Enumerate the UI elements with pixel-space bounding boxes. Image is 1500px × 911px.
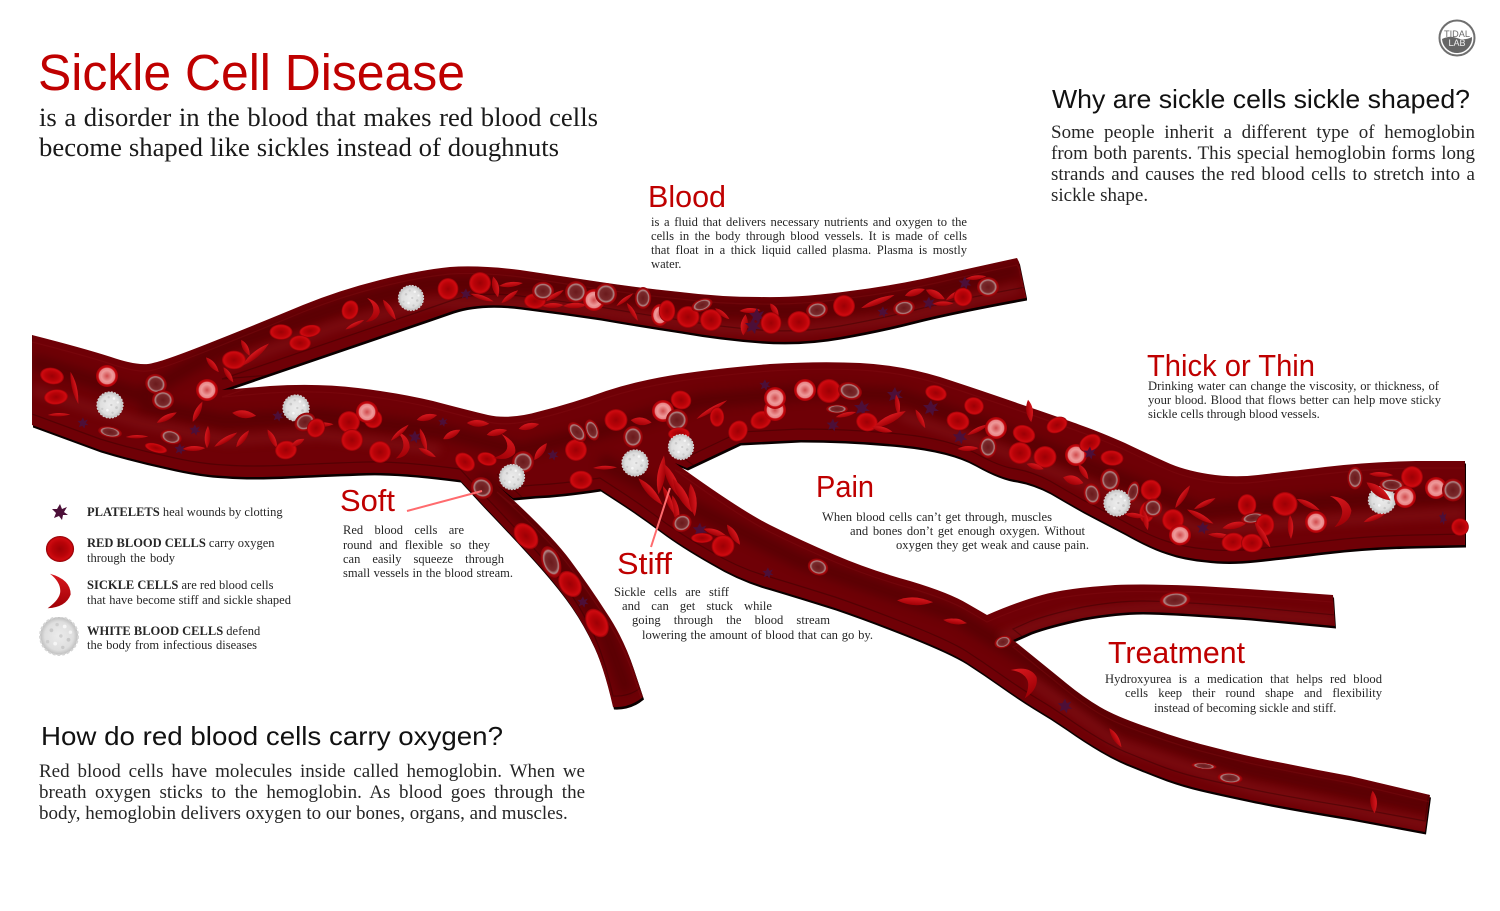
text: soft: small vessels in the blood stream. (343, 566, 513, 580)
legend item: red blood cells: through the body (87, 551, 175, 565)
text: how red blood cells carry oxygen: breath oxygen sticks to the hemoglobin. As blood goes through the (39, 782, 585, 803)
legend item: red blood cells: RED BLOOD CELLS carry oxygen (87, 536, 275, 550)
text: treatment: cells keep their round shape and flexibility (1125, 686, 1382, 700)
blood cells: stuck sickle cells and lower vessel (636, 455, 967, 626)
text: why sickle shaped: sickle shape. (1051, 185, 1148, 206)
logo: tidal lab: LAB (1448, 38, 1466, 48)
text: soft: Red blood cells are (343, 523, 464, 537)
callout line: soft (407, 491, 482, 511)
text: blood: cells in the body through blood vessels. It is made of cells (651, 229, 967, 243)
legend item: sickle cells (48, 574, 291, 608)
blood cells: upper vessel (269, 272, 999, 351)
blood cells: soft branch (466, 473, 614, 642)
heading: how red blood cells carry oxygen: How do red blood cells carry oxygen? (41, 721, 503, 751)
heading: soft: Soft (340, 483, 395, 518)
heading: pain: Pain (816, 469, 874, 504)
text: pain: When blood cells can’t get through, muscles (822, 510, 1052, 524)
text: treatment: Hydroxyurea is a medication that helps red blood (1105, 672, 1382, 686)
icon: sickle cell (48, 574, 71, 608)
text: thick or thin: sickle cells through blood vessels. (1148, 407, 1320, 421)
text: stiff: and can get stuck while (622, 599, 772, 613)
text: stiff: Sickle cells are stiff (614, 585, 729, 599)
text: pain: and bones don’t get enough oxygen. Without (850, 524, 1085, 538)
legend item: platelets: PLATELETS heal wounds by clotting (87, 505, 283, 519)
legend item: red blood cells (46, 536, 275, 565)
text: blood: water. (651, 257, 681, 271)
heading: blood: Blood (648, 179, 726, 214)
text: blood: is a fluid that delivers necessary nutrients and oxygen to the (651, 215, 967, 229)
text: why sickle shaped (1051, 122, 1475, 206)
subtitle: is a disorder in the blood that makes red blood cells (39, 102, 598, 132)
text: stiff: going through the blood stream (632, 613, 830, 627)
subtitle: become shaped like sickles instead of doughnuts (39, 132, 559, 162)
text: soft (343, 523, 513, 580)
text: thick or thin: Drinking water can change the viscosity, or thickness, of (1148, 379, 1439, 393)
text: why sickle shaped: strands and causes the red blood cells to stretch into a (1051, 164, 1475, 185)
text: how red blood cells carry oxygen (39, 761, 585, 824)
text: thick or thin: your blood. Blood that flows better can help move sticky (1148, 393, 1441, 407)
heading: why sickle shaped: Why are sickle cells sickle shaped? (1052, 84, 1470, 114)
legend (39, 504, 291, 656)
text: blood (651, 215, 967, 271)
text: treatment (1105, 672, 1382, 715)
blood cells: treatment vessel (949, 590, 1377, 813)
subtitle (39, 102, 598, 162)
text: how red blood cells carry oxygen: Red blood cells have molecules inside called hemoglobin. When we (39, 761, 585, 782)
text: why sickle shaped: Some people inherit a different type of hemoglobin (1051, 122, 1475, 143)
legend item: white blood cells (39, 617, 260, 656)
callout line: stiff (651, 488, 670, 547)
logo: tidal lab (1440, 20, 1474, 56)
text: blood: that float in a thick liquid called plasma. Plasma is mostly (651, 243, 967, 257)
title: Sickle Cell Disease (38, 44, 465, 101)
icon: platelet (52, 504, 68, 520)
text: soft: can easily squeeze through (343, 552, 504, 566)
text: pain: oxygen they get weak and cause pain. (896, 538, 1089, 552)
text: treatment: instead of becoming sickle and stiff. (1154, 701, 1336, 715)
legend item: white blood cells: the body from infectious diseases (87, 638, 257, 652)
logo: tidal lab: TIDAL (1444, 29, 1470, 39)
text: pain (822, 510, 1089, 552)
text: soft: round and flexible so they (343, 538, 490, 552)
blood cells: trunk and middle vessel (38, 338, 1469, 553)
icon: red blood cell (46, 536, 74, 562)
legend item: sickle cells: that have become stiff and sickle shaped (87, 593, 291, 607)
text: how red blood cells carry oxygen: body, hemoglobin delivers oxygen to our bones, organs, and muscles. (39, 803, 568, 824)
heading: thick or thin: Thick or Thin (1147, 348, 1315, 383)
blood vessel network (32, 247, 1466, 839)
legend item: white blood cells: WHITE BLOOD CELLS defend (87, 624, 260, 638)
heading: treatment: Treatment (1108, 635, 1245, 670)
text: stiff: lowering the amount of blood that can go by. (642, 628, 873, 642)
cells overlapping white cells (291, 409, 1416, 508)
text: stiff (614, 585, 873, 642)
icon: white blood cell (39, 617, 79, 656)
text: thick or thin (1148, 379, 1441, 421)
white blood cell (398, 286, 424, 310)
text: why sickle shaped: from both parents. This special hemoglobin forms long (1051, 143, 1475, 164)
legend item: sickle cells: SICKLE CELLS are red blood cells (87, 578, 273, 592)
white blood cells: middle vessel (97, 392, 1396, 516)
heading: stiff: Stiff (617, 546, 672, 581)
